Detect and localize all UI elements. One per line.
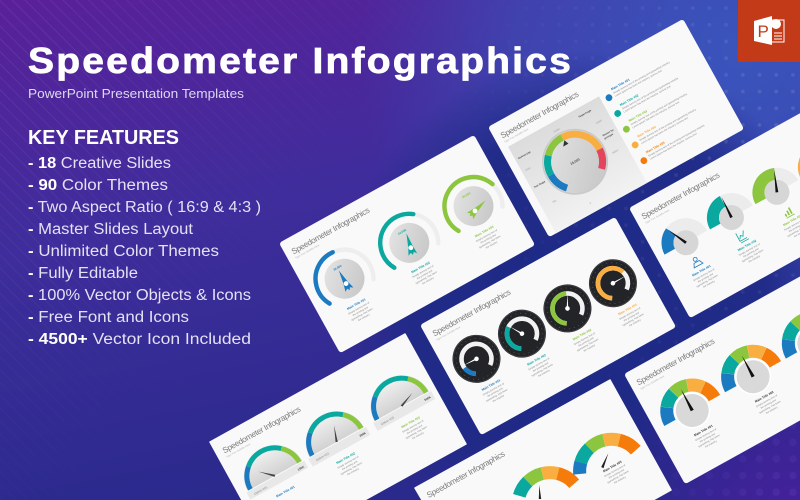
gauge 1 xyxy=(231,433,308,500)
gauge 1 text: typesetting, Has been xyxy=(696,274,719,288)
feature list: - Fully Editable xyxy=(28,265,138,282)
gauge 3 text: the industry xyxy=(412,431,425,440)
dial 4 xyxy=(580,251,646,316)
panel: slide with segmented colour gauges: Speedometer Infographics xyxy=(635,337,716,387)
dial 3 text: typesetting, Has been xyxy=(577,338,600,352)
gauge 1 text: Simply dummy text of xyxy=(348,301,370,316)
list item 5: Main Title #05 xyxy=(645,141,666,154)
gauge 3: Option #03 xyxy=(380,415,395,426)
donut labels: 500 xyxy=(552,199,558,204)
panel: slide with three ring gauges: Type Your Subtitle Here xyxy=(294,243,321,260)
gauge 2 text: Simply dummy text of xyxy=(738,243,761,257)
donut labels: 10000 xyxy=(553,127,561,134)
list item 4: Simply dummy text of the printing and typesetting industry. xyxy=(639,108,697,142)
gauge 2 xyxy=(704,188,757,243)
gauge 2 text: the printing and xyxy=(342,460,359,471)
gauge 3 text xyxy=(601,459,632,487)
feature list: - Two Aspect Ratio ( 16:9 & 4:3 ) xyxy=(28,199,261,216)
list item 5: Simply dummy text of the printing and typesetting industry. xyxy=(648,124,706,158)
gauge 1 text: Simply dummy text of xyxy=(695,428,717,442)
gauge 2 text: typesetting, Has been xyxy=(340,461,363,476)
donut labels: 5000 xyxy=(525,166,532,172)
dial 4 text: typesetting, Has been xyxy=(622,312,645,327)
list item 2: Lorem Ipsum has been the industry. dummy text xyxy=(623,85,672,114)
gauge 3 text: typesetting, Has been xyxy=(607,470,630,484)
dial 3 text xyxy=(570,327,601,355)
slide heading: Speedometer Infographics xyxy=(221,405,302,455)
panel: slide with donut gauge and list: Type Your Subtitle Here xyxy=(503,127,530,144)
list item 5 xyxy=(637,119,708,165)
gauge 2 xyxy=(705,328,800,425)
gauge 2 text xyxy=(334,450,365,479)
gauge 2 text: Simply dummy text of xyxy=(756,394,778,408)
feature list: - 100% Vector Objects & Icons xyxy=(28,287,251,304)
title: Speedometer Infographics xyxy=(28,40,573,81)
dial 1 text: the printing and xyxy=(487,387,504,398)
panel: slide with half-disc gauges and icons: Speedometer Infographics xyxy=(640,171,721,221)
gauge 2 text: Main Title #02 xyxy=(336,451,356,465)
needle 3 xyxy=(601,453,608,468)
donut labels: principle xyxy=(604,133,614,140)
gauge 1 text: Simply dummy text of xyxy=(693,268,715,282)
panel: slide with half-disc gauges and icons xyxy=(629,100,800,318)
gauge 3 xyxy=(420,152,527,260)
gauge 2 text: the industry xyxy=(765,406,779,415)
panel: slide with donut gauge and list: Speedometer Infographics xyxy=(499,90,580,140)
dial 3 text: the printing and xyxy=(578,336,595,348)
gauge 3: 20,000 xyxy=(461,191,472,199)
panel: slide with three ring gauges xyxy=(279,133,539,353)
gauge 1 text: typesetting, Has been xyxy=(351,307,374,322)
gauge 3: 500K xyxy=(424,395,432,402)
gauge 2 text: Simply dummy text of xyxy=(337,455,360,470)
gauge 3 xyxy=(358,363,435,431)
list item 1 xyxy=(602,56,673,102)
gauge 1 text: the industry xyxy=(357,313,371,322)
dial 4 text xyxy=(616,302,647,330)
donut labels: Desired Gap xyxy=(517,150,532,160)
gauge 1 text: the printing and xyxy=(699,432,716,444)
list item 1: Simply dummy text of the printing and typesetting industry. xyxy=(613,61,671,95)
list item 4: Main Title #04 xyxy=(637,125,657,139)
list item 3: Main Title #03 xyxy=(628,109,648,123)
gauge 1 text: typesetting, Has been xyxy=(698,434,721,448)
gauge 2 text xyxy=(753,389,784,418)
gauge 3 text xyxy=(781,212,800,241)
dial 3 xyxy=(535,276,600,341)
gauge 2 text: the printing and xyxy=(760,399,777,410)
dial 2 text: the printing and xyxy=(532,362,549,373)
gauge 2: 300K xyxy=(359,431,368,438)
list item 2 xyxy=(611,72,681,118)
gauge 2: 14,000 xyxy=(397,228,407,236)
gauge 1 text: Main Title #01 xyxy=(691,264,712,278)
gauge 3 text: the printing and xyxy=(406,424,424,435)
feature list xyxy=(28,155,261,348)
gauge 3 text: the printing and xyxy=(608,468,625,480)
gauge 1 xyxy=(291,225,398,333)
dial 1 xyxy=(444,326,509,391)
gauge 1 text: the printing and xyxy=(352,306,369,317)
gauge 2 text: Simply dummy text of xyxy=(412,265,434,279)
dial 2 xyxy=(489,301,555,366)
dial 3 text: the industry xyxy=(583,343,597,353)
gauge 2 text: Main Title #02 xyxy=(737,239,757,252)
gauge 2 text: typesetting, Has been xyxy=(741,249,765,263)
list item 4: Lorem Ipsum has been the industry. dummy text xyxy=(641,116,689,145)
panel: slide with three ring gauges: Speedometer Infographics xyxy=(290,206,371,256)
gauge 1 text: Main Title #01 xyxy=(346,297,367,311)
gray chart backdrop xyxy=(508,96,647,233)
gauge 3 text: Main Title #03 xyxy=(474,225,494,238)
list item 3 xyxy=(620,88,690,134)
dial 2 text: typesetting, Has been xyxy=(531,363,554,378)
list item 1: Lorem Ipsum has been the industry. dummy text xyxy=(614,69,663,98)
panel: slide with option gauges xyxy=(210,334,466,500)
gauge 1: 100K xyxy=(297,464,306,472)
gauge 2 text: the industry xyxy=(422,276,435,285)
dial 4 text: the industry xyxy=(629,318,642,327)
donut gauge: 15,000 xyxy=(570,157,581,166)
dial 2 text xyxy=(525,352,556,381)
gauge 2 text: Main Title #02 xyxy=(410,261,431,274)
panel: slide with segmented colour gauges xyxy=(624,266,800,484)
list item 5: Lorem Ipsum has been the industry. dummy text xyxy=(649,132,698,161)
dial 4 text: the printing and xyxy=(623,311,640,322)
gauge 3 text xyxy=(399,414,430,443)
gauge 3 text: Simply dummy text of xyxy=(402,419,424,434)
gauge 3 text: typesetting, Has been xyxy=(479,235,502,249)
subtitle: PowerPoint Presentation Templates xyxy=(28,86,245,101)
dial 2 text: the industry xyxy=(538,369,551,378)
gauge 2 text: typesetting, Has been xyxy=(415,270,438,285)
donut labels: Reason for xyxy=(602,129,614,137)
gauge 1: 16,000 xyxy=(332,264,343,272)
icon: PowerPoint badge: P xyxy=(758,22,769,41)
feature list: - Master Slides Layout xyxy=(28,221,194,238)
slide heading: Speedometer Infographics xyxy=(425,449,507,500)
gauge 3 text: Simply dummy text of xyxy=(604,464,626,478)
gauge 2 text xyxy=(735,238,766,266)
gauge 3 xyxy=(750,164,800,217)
panel: slide with dark dial gauges: Type Your Subtitle Here xyxy=(435,325,462,342)
panel: slide with wide sector gauges xyxy=(415,380,671,500)
gauge 1 text xyxy=(345,296,376,325)
gauge 3 text: Main Title #03 xyxy=(400,415,421,429)
gauge 3 text xyxy=(473,224,504,252)
gauge 1: Option #01 xyxy=(253,485,268,496)
dial 2 text: Main Title #02 xyxy=(526,353,547,367)
gauge 1 text: the industry xyxy=(703,279,716,289)
gauge 2 text: typesetting, Has been xyxy=(759,400,782,415)
dial 1 text xyxy=(479,377,510,406)
list item 4 xyxy=(628,104,699,150)
gauge 1 xyxy=(659,215,711,268)
gauge 3 xyxy=(765,295,800,392)
list item 2: Simply dummy text of the printing and typesetting industry. xyxy=(621,76,680,111)
gauge 3 xyxy=(580,439,636,474)
slide heading: Type Your Subtitle Here xyxy=(225,442,252,459)
gauge 1 text: the industry xyxy=(705,439,718,449)
panel: slide with segmented colour gauges: Type Your Subtitle Here xyxy=(639,374,666,391)
dial 1 text: Simply dummy text of xyxy=(482,382,505,397)
gauge 2 text xyxy=(409,260,440,288)
dial 4 text: Simply dummy text of xyxy=(619,307,641,321)
panel: slide with half-disc gauges and icons: Type Your Subtitle Here xyxy=(644,208,671,225)
feature list: - 4500+ Vector Icon Included xyxy=(28,331,251,348)
donut gauge xyxy=(522,109,628,215)
gauge 1 text: Main Title #01 xyxy=(275,485,296,498)
gauge 2 text: Main Title #02 xyxy=(754,390,775,404)
gauge 3 text: Main Title #03 xyxy=(602,460,623,473)
gauge 2 text: the industry xyxy=(748,254,762,264)
donut labels: 0 xyxy=(589,201,592,205)
icon: PowerPoint badge xyxy=(738,0,800,62)
gauge 2 xyxy=(355,189,463,297)
dial 3 text: Main Title #03 xyxy=(572,328,592,341)
dial 1 text: Main Title #01 xyxy=(481,378,501,392)
donut labels xyxy=(514,104,640,225)
donut labels: 15000 xyxy=(595,119,603,125)
panel: slide with dark dial gauges xyxy=(420,217,676,435)
gauge 1 text: Main Title #01 xyxy=(693,424,714,437)
dial 3 text: Simply dummy text of xyxy=(573,332,596,346)
panel: slide with dark dial gauges: Speedometer Infographics xyxy=(431,288,512,338)
heading: key features: KEY FEATURES xyxy=(28,126,179,149)
gauge 2 text: the printing and xyxy=(743,247,760,258)
gauge 1 text: the printing and xyxy=(697,272,714,284)
gauge 3 text: the industry xyxy=(485,240,499,250)
dial 2 text: Simply dummy text of xyxy=(528,357,550,371)
list item 2: Main Title #02 xyxy=(619,93,639,107)
feature list: - 18 Creative Slides xyxy=(28,155,171,172)
dial 4 text: Main Title #04 xyxy=(617,303,638,316)
list item 1: Main Title #01 xyxy=(610,78,631,91)
panel: slide with donut gauge and list xyxy=(488,19,744,237)
gauge 1 text xyxy=(690,263,721,291)
gauge 3 text: the printing and xyxy=(480,233,497,245)
needle 2 xyxy=(539,485,541,499)
icon 2 xyxy=(736,229,749,243)
gauge 2 text: the printing and xyxy=(416,269,434,280)
donut labels: Target Angle xyxy=(578,109,593,119)
gauge 1 text xyxy=(692,423,723,451)
icon 1 xyxy=(690,255,703,268)
gauge 4 xyxy=(797,142,800,192)
gauge 3 text: typesetting, Has been xyxy=(405,425,428,440)
feature list: - Unlimited Color Themes xyxy=(28,243,219,260)
feature list: - 90 Color Themes xyxy=(28,177,168,194)
feature list: - Free Font and Icons xyxy=(28,309,189,326)
gauge 2 text: the industry xyxy=(347,467,360,476)
gauge 2 xyxy=(293,399,370,467)
gauge 2 xyxy=(519,473,574,496)
gauge 3 text: Simply dummy text of xyxy=(475,229,498,243)
donut labels: Test Target xyxy=(533,180,546,189)
icon 3 xyxy=(783,207,795,219)
list item 3: Lorem Ipsum has been the industry. dummy text xyxy=(632,101,680,129)
list item 3: Simply dummy text of the printing and typesetting industry. xyxy=(630,92,688,126)
gauge 3 text: the industry xyxy=(614,475,627,485)
dial 1 text: typesetting, Has been xyxy=(486,388,509,403)
gauge 1 xyxy=(644,362,741,459)
donut labels: 20000 xyxy=(612,149,620,155)
gauge 2: Option #02 xyxy=(315,451,330,462)
dial 1 text: the industry xyxy=(492,394,506,403)
